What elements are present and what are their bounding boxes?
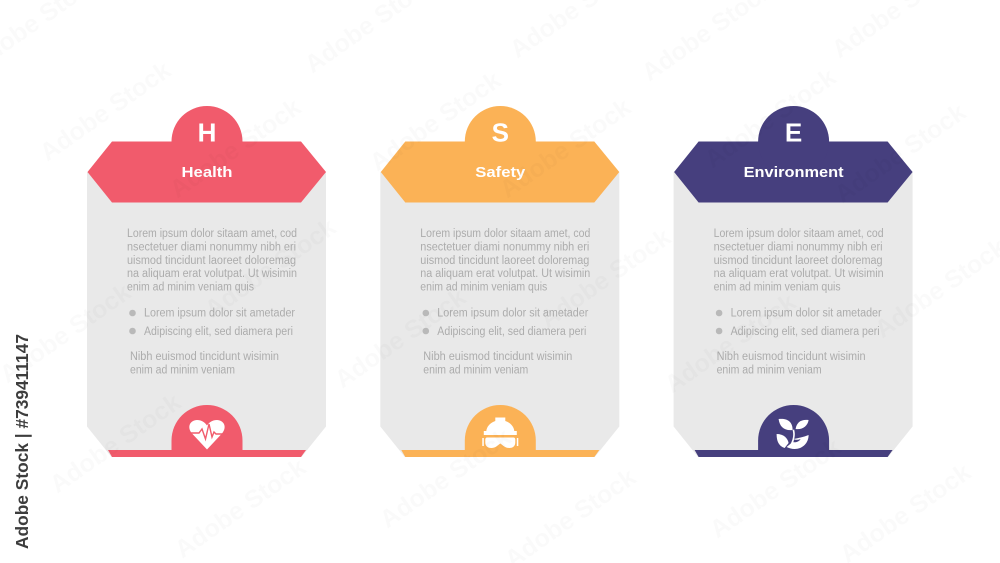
health card body [87, 172, 326, 457]
icon: heart with pulse [189, 420, 229, 450]
watermark pattern: Adobe Stock [165, 93, 306, 204]
environment footer bar [695, 405, 893, 457]
health footer bar [108, 405, 306, 457]
environment header banner [674, 106, 913, 202]
environment heading: Environment [744, 164, 844, 181]
icon: plant in hand [777, 419, 809, 449]
safety initial: S [492, 118, 509, 148]
watermark pattern: Adobe Stock [535, 223, 676, 334]
health header banner [88, 106, 326, 202]
watermark pattern: Adobe Stock [200, 213, 341, 324]
watermark pattern: Adobe Stock [170, 453, 311, 563]
watermark pattern: Adobe Stock [365, 66, 506, 177]
safety heading: Safety [475, 164, 526, 181]
panel: safety [380, 106, 619, 457]
watermark pattern: Adobe Stock [35, 56, 176, 167]
icon: hard hat with goggles [482, 418, 518, 448]
health heading: Health [182, 164, 232, 181]
watermark pattern: Adobe Stock [330, 283, 471, 394]
panel: environment [674, 106, 913, 457]
environment initial: E [785, 118, 802, 148]
panel: health [87, 106, 326, 457]
stock id caption: Adobe Stock | #739411147 [12, 334, 32, 549]
safety card body [380, 172, 619, 457]
health text block [127, 228, 297, 376]
watermark pattern: Adobe Stock [45, 388, 186, 499]
watermark pattern: Adobe Stock [705, 433, 846, 544]
safety text block [420, 228, 590, 376]
watermark pattern: Adobe Stock [375, 423, 516, 534]
watermark pattern: Adobe Stock [495, 93, 636, 204]
watermark pattern: Adobe Stock [830, 98, 971, 209]
health initial: H [198, 118, 216, 148]
safety footer bar [401, 405, 599, 457]
safety header banner [381, 106, 619, 202]
watermark pattern: Adobe Stock [660, 288, 801, 399]
environment text block [714, 228, 884, 376]
watermark pattern: Adobe Stock [700, 63, 841, 174]
environment card body [674, 172, 913, 457]
